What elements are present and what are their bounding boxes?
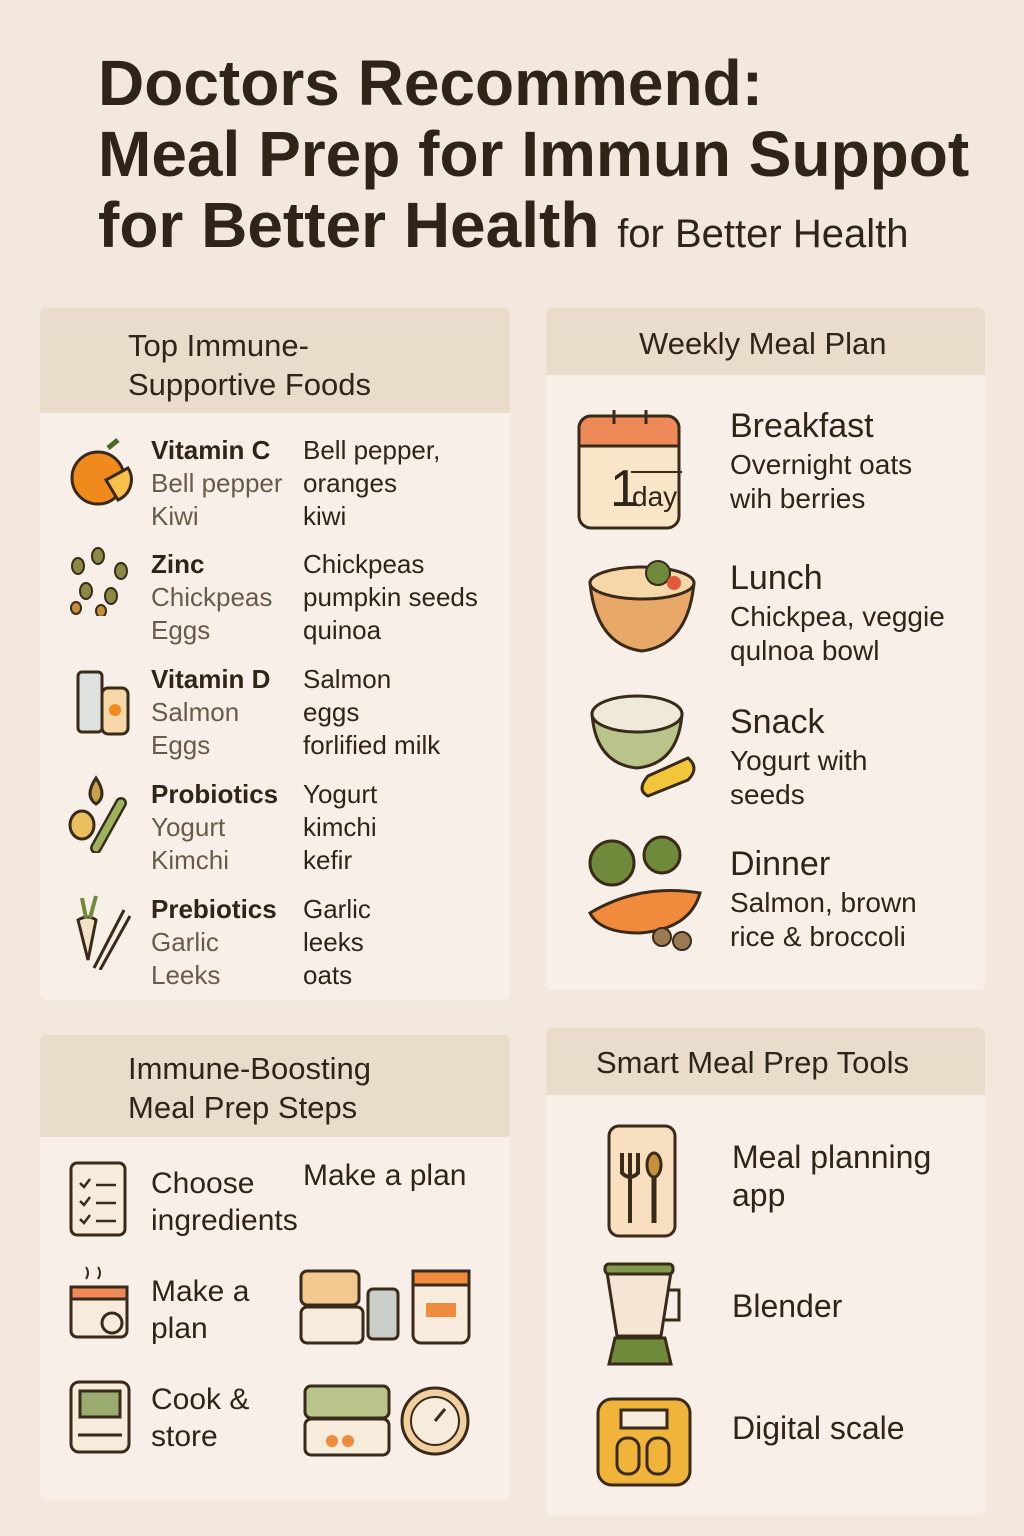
text: meal planning app <box>732 1139 931 1213</box>
title <box>98 47 969 261</box>
food rows: leeks <box>303 927 364 957</box>
text: step 2: plan <box>151 1312 208 1345</box>
text: dinner: Salmon, brown <box>730 887 917 918</box>
text: snack: seeds <box>730 779 805 810</box>
food rows: Bell pepper, <box>303 435 440 465</box>
food rows: Vitamin D <box>151 664 270 694</box>
food rows: Zinc <box>151 549 204 579</box>
text: dinner <box>730 845 917 952</box>
food rows: kiwi <box>303 501 346 531</box>
panel: smart meal prep tools <box>546 1028 985 1515</box>
text: breakfast: Overnight oats <box>730 449 912 480</box>
text: lunch: Lunch <box>730 559 823 597</box>
heading: weekly meal plan <box>546 308 985 375</box>
icon: calendar: 1 <box>610 460 639 518</box>
text: snack: Snack <box>730 703 824 741</box>
title: Doctors Recommend: <box>98 47 763 119</box>
food rows: Salmon <box>151 697 239 727</box>
food rows: Kimchi <box>151 845 229 875</box>
icon: stove <box>70 1266 128 1338</box>
text: breakfast: wih berries <box>730 483 865 514</box>
heading: weekly meal plan: Weekly Meal Plan <box>639 326 887 361</box>
icon: digital scale <box>596 1398 692 1486</box>
food rows: Kiwi <box>151 501 199 531</box>
panel: weekly meal plan <box>546 308 985 990</box>
text: lunch: Chickpea, veggie <box>730 601 945 632</box>
icon: snack bowl <box>590 694 696 798</box>
text: digital scale: Digital scale <box>732 1410 905 1446</box>
food rows: Vitamin C <box>151 435 270 465</box>
title: for Better Health for Better Health <box>98 189 908 261</box>
food rows: Garlic <box>303 894 371 924</box>
heading: tools <box>546 1028 985 1095</box>
heading: foods: Supportive Foods <box>128 367 371 402</box>
text: breakfast <box>730 407 912 514</box>
icon: seeds <box>70 547 128 616</box>
icon: oven <box>70 1380 130 1454</box>
food rows: forlified milk <box>303 730 440 760</box>
text: breakfast: Breakfast <box>730 407 874 445</box>
text: dinner: rice & broccoli <box>730 921 906 952</box>
icon: containers and clock <box>304 1384 470 1456</box>
food rows: pumpkin seeds <box>303 582 478 612</box>
food rows: Prebiotics <box>151 894 277 924</box>
text: step 3 <box>151 1383 249 1453</box>
icon: containers <box>300 1270 470 1344</box>
icon: calendar <box>578 410 682 530</box>
food rows: Probiotics <box>151 779 278 809</box>
panel: top immune-supportive foods <box>40 308 510 1000</box>
text: step 1: Choose <box>151 1167 254 1200</box>
text: lunch <box>730 559 945 666</box>
icon: calendar: day <box>632 481 677 512</box>
text: step 1 <box>151 1167 298 1237</box>
food rows: Chickpeas <box>151 582 272 612</box>
heading: steps <box>40 1035 510 1137</box>
text: meal planning app: app <box>732 1177 785 1213</box>
text: step 2 <box>151 1275 250 1345</box>
text: step 1: ingredients <box>151 1204 298 1237</box>
food rows: Salmon <box>303 664 391 694</box>
icon: checklist <box>70 1162 126 1236</box>
panel: immune-boosting meal prep steps: Make a plan <box>303 1159 466 1192</box>
icon: blender <box>604 1262 680 1366</box>
text: blender: Blender <box>732 1288 842 1324</box>
icon: probiotics <box>68 775 127 853</box>
text: snack: Yogurt with <box>730 745 868 776</box>
heading: tools: Smart Meal Prep Tools <box>596 1045 909 1080</box>
text: step 3: store <box>151 1420 218 1453</box>
heading: steps: Immune-Boosting <box>128 1051 371 1086</box>
food rows: Yogurt <box>303 779 377 809</box>
text: lunch: qulnoa bowl <box>730 635 879 666</box>
food rows: eggs <box>303 697 359 727</box>
food rows: Bell pepper <box>151 468 283 498</box>
panel: immune-boosting meal prep steps <box>40 1035 510 1500</box>
food rows: Leeks <box>151 960 220 990</box>
heading: foods <box>40 308 510 413</box>
food rows <box>68 435 478 990</box>
heading: foods: Top Immune- <box>128 328 309 363</box>
icon: milk bottles <box>76 670 130 736</box>
icon: orange <box>70 438 133 506</box>
food rows: Eggs <box>151 615 210 645</box>
food rows: oats <box>303 960 352 990</box>
food rows: Yogurt <box>151 812 225 842</box>
text: dinner: Dinner <box>730 845 830 883</box>
text: step 2: Make a <box>151 1275 249 1308</box>
food rows: quinoa <box>303 615 381 645</box>
food rows: Eggs <box>151 730 210 760</box>
title: Meal Prep for Immun Suppot <box>98 118 969 190</box>
food rows: kefir <box>303 845 352 875</box>
text: step 3: Cook & <box>151 1383 249 1416</box>
food rows: Chickpeas <box>303 549 424 579</box>
food rows: oranges <box>303 468 397 498</box>
icon: dinner <box>588 836 702 951</box>
icon: phone app <box>608 1124 676 1238</box>
heading: steps: Meal Prep Steps <box>128 1090 357 1125</box>
text: meal planning app: Meal planning <box>732 1139 931 1175</box>
text: snack <box>730 703 868 810</box>
icon: garlic leeks <box>76 896 132 970</box>
icon: bowl <box>588 560 696 652</box>
food rows: kimchi <box>303 812 377 842</box>
food rows: Garlic <box>151 927 219 957</box>
